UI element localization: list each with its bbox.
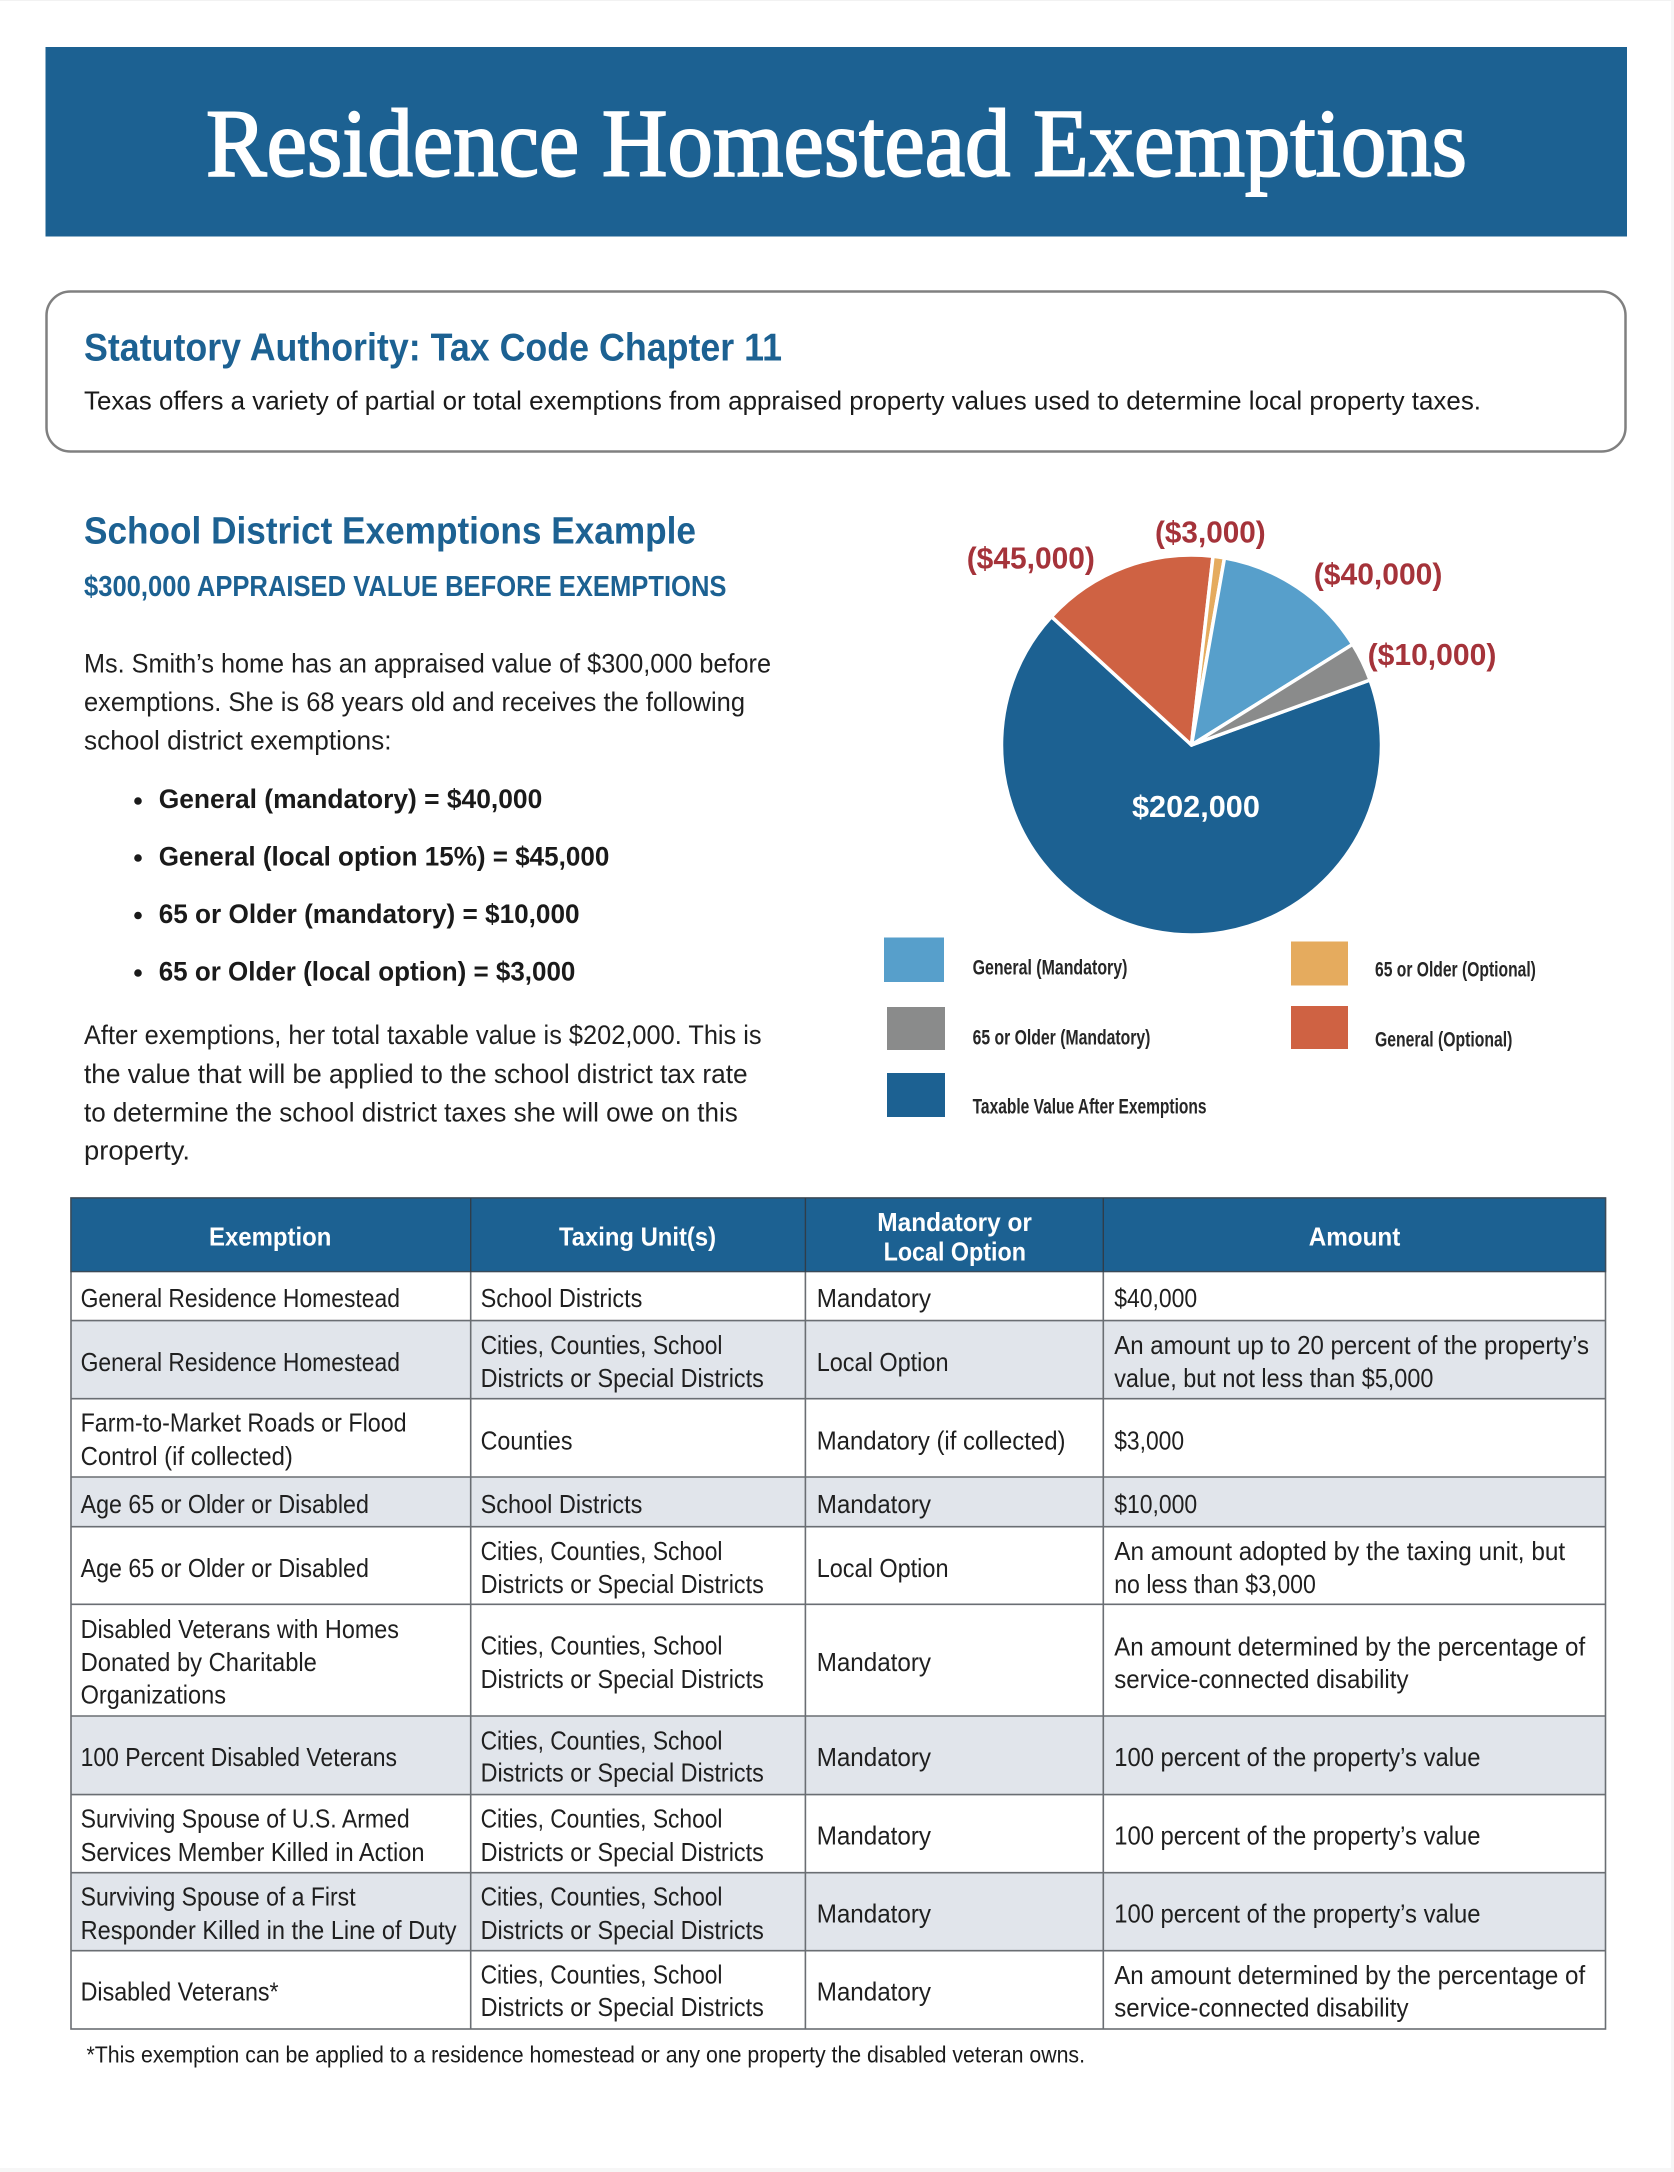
row 1: General Residence Homestead [81,1283,400,1313]
text: intro paragraph: school district exemptions: [84,725,392,755]
label: 65 mandatory amount: ($10,000) [1368,637,1496,672]
row 2: General Residence Homestead [81,1347,400,1377]
text: closing paragraph: property. [84,1136,190,1166]
panel: school district example [84,510,771,1166]
text: statutory description: Texas offers a variety of partial or total exemptions from appraised property values used to determine local property taxes. [84,386,1481,416]
row 2: Local Option [817,1347,948,1377]
row 4: Mandatory [817,1489,931,1519]
label: general optional amount: ($45,000) [967,540,1095,575]
row 8: 100 percent of the property’s value [1114,1820,1481,1850]
legend item: 65 or older mandatory [887,1007,1150,1050]
row 5: no less than $3,000 [1114,1569,1316,1599]
heading: statutory authority: Statutory Authority: Tax Code Chapter 11 [84,326,782,370]
table header: Exemption [209,1222,331,1252]
legend item: general optional: General (Optional) [1375,1028,1512,1052]
table header: Mandatory or [877,1207,1032,1237]
legend item: 65 or older mandatory: 65 or Older (Mandatory) [973,1027,1150,1050]
subheading: appraised value: $300,000 APPRAISED VALUE BEFORE EXEMPTIONS [84,571,726,603]
row 6: Districts or Special Districts [481,1664,764,1694]
row 6 [81,1614,1586,1710]
row 6: Mandatory [817,1647,931,1677]
table header: Local Option [884,1237,1026,1267]
row 9: Surviving Spouse of a First [81,1882,356,1912]
list: exemptions [134,784,609,987]
row 7: Mandatory [817,1742,931,1772]
row 5 [81,1536,1566,1599]
row 9 [81,1882,1481,1945]
legend item: 65 or older optional: 65 or Older (Optional) [1375,958,1536,982]
legend item: general mandatory: General (Mandatory) [973,957,1127,980]
row 2: An amount up to 20 percent of the property’s [1114,1330,1589,1360]
row 2: Districts or Special Districts [481,1363,764,1393]
slice: 65 or older mandatory [1192,644,1370,745]
row 9: Districts or Special Districts [481,1915,764,1945]
row 1: $40,000 [1114,1283,1197,1313]
row 7 [81,1726,1481,1788]
text: intro paragraph [84,648,771,755]
row 3: Control (if collected) [81,1441,293,1471]
row 4 [81,1489,1197,1519]
row 3: Counties [481,1425,572,1455]
row 6: Cities, Counties, School [481,1631,722,1661]
list: exemptions: 65 or Older (mandatory) = $10,000 [159,899,580,929]
chart legend [884,938,1536,1118]
row 1 [81,1283,1197,1313]
row 4: Age 65 or Older or Disabled [81,1489,369,1519]
row 10: Cities, Counties, School [481,1959,722,1989]
row 8: Districts or Special Districts [481,1837,764,1867]
footnote: *This exemption can be applied to a residence homestead or any one property the disabled veteran owns. [86,2041,1085,2067]
row 10: Mandatory [817,1977,931,2007]
row 10 [81,1959,1586,2022]
row 10: An amount determined by the percentage of [1114,1960,1586,1990]
title banner [46,47,1627,236]
row 6: Disabled Veterans with Homes [81,1614,399,1644]
row 7: 100 percent of the property’s value [1114,1742,1481,1772]
row 5: Age 65 or Older or Disabled [81,1553,369,1583]
legend item: taxable value [887,1073,1206,1118]
pie chart [967,514,1496,935]
table header [71,1198,1606,1272]
row 1: School Districts [481,1283,642,1313]
row 9: Responder Killed in the Line of Duty [81,1915,457,1945]
row 8: Cities, Counties, School [481,1804,722,1834]
label: general mandatory amount: ($40,000) [1314,556,1442,592]
row 5: Cities, Counties, School [481,1536,722,1566]
panel: statutory authority [46,292,1626,452]
title: Residence Homestead Exemptions [206,90,1467,196]
row 2: value, but not less than $5,000 [1114,1363,1433,1393]
list: exemptions: General (mandatory) = $40,000 [159,784,542,814]
heading: school district exemptions example: School District Exemptions Example [84,510,696,552]
row 1: Mandatory [817,1283,931,1313]
row 8: Mandatory [817,1820,931,1850]
row 2: Cities, Counties, School [481,1330,722,1360]
row 5: An amount adopted by the taxing unit, but [1114,1536,1566,1566]
text: intro paragraph: Ms. Smith’s home has an appraised value of $300,000 before [84,648,771,678]
text: closing paragraph [84,1020,762,1166]
row 6: Donated by Charitable [81,1647,317,1677]
text: closing paragraph: After exemptions, her total taxable value is $202,000. This is [84,1020,762,1050]
row 6: An amount determined by the percentage of [1114,1631,1586,1661]
text: closing paragraph: the value that will be applied to the school district tax rate [84,1059,748,1089]
row 10: Districts or Special Districts [481,1992,764,2022]
row 8: Services Member Killed in Action [81,1837,424,1867]
row 8: Surviving Spouse of U.S. Armed [81,1804,410,1834]
legend item: 65 or older optional [1291,942,1536,986]
text: intro paragraph: exemptions. She is 68 years old and receives the following [84,687,745,717]
row 9: 100 percent of the property’s value [1114,1899,1481,1929]
row 9: Mandatory [817,1899,931,1929]
row 8 [81,1804,1481,1867]
row 6: Organizations [81,1680,226,1710]
slice: general optional [1051,555,1213,745]
row 2 [81,1330,1589,1393]
row 7: Cities, Counties, School [481,1726,722,1756]
slice: general mandatory [1192,558,1353,745]
row 3: Farm-to-Market Roads or Flood [81,1408,407,1438]
slice: taxable value [1001,617,1381,935]
row 4: $10,000 [1114,1489,1197,1519]
text: closing paragraph: to determine the school district taxes she will owe on this [84,1097,738,1127]
slice: 65 or older optional [1192,556,1224,745]
row 3: Mandatory (if collected) [817,1425,1066,1455]
row 10: Disabled Veterans* [81,1976,279,2006]
row 4: School Districts [481,1489,642,1519]
legend item: taxable value: Taxable Value After Exemptions [973,1096,1206,1118]
table header: Taxing Unit(s) [559,1222,716,1252]
row 3 [81,1408,1184,1471]
row 3: $3,000 [1114,1425,1184,1455]
list: exemptions: 65 or Older (local option) = $3,000 [159,957,575,987]
label: taxable value amount: $202,000 [1132,789,1260,824]
row 7: 100 Percent Disabled Veterans [81,1742,397,1772]
table: exemptions [71,1198,1606,2029]
legend item: general optional [1291,1006,1512,1052]
row 6: service-connected disability [1114,1664,1409,1694]
table header: Amount [1309,1222,1401,1252]
list: exemptions: General (local option 15%) = $45,000 [159,842,609,872]
label: 65 optional amount: ($3,000) [1155,514,1266,550]
row 5: Districts or Special Districts [481,1569,764,1599]
row 9: Cities, Counties, School [481,1882,722,1912]
row 10: service-connected disability [1114,1992,1409,2022]
legend item: general mandatory [884,938,1127,982]
row 5: Local Option [817,1553,948,1583]
row 7: Districts or Special Districts [481,1758,764,1788]
